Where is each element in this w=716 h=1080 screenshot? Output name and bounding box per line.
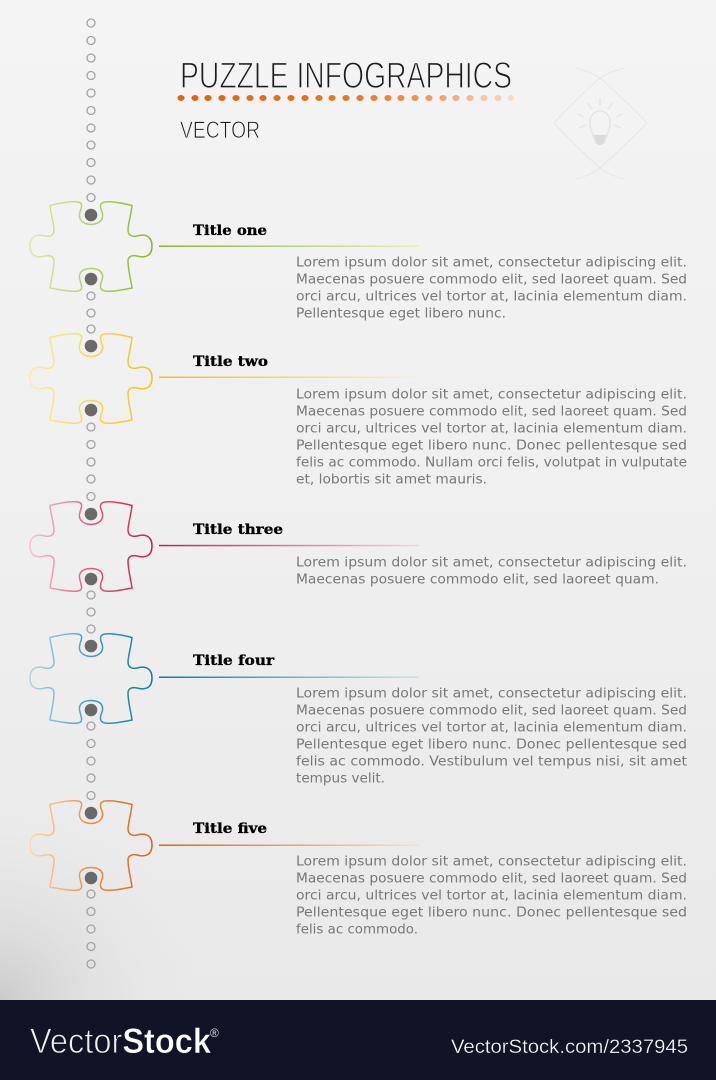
puzzle piece one xyxy=(30,202,152,291)
panel: step three xyxy=(30,502,687,591)
title: Title three xyxy=(193,522,283,538)
body text xyxy=(296,686,687,786)
body text: Pellentesque eget libero nunc. Donec pellentesque sed xyxy=(296,906,687,920)
footer bar xyxy=(0,1000,716,1080)
title: Title one xyxy=(193,223,267,239)
body text: Maecenas posuere commodo elit, sed laoreet quam. Sed xyxy=(296,704,687,718)
title: Title five xyxy=(193,821,267,837)
title: Title four xyxy=(193,653,275,669)
body text: Lorem ipsum dolor sit amet, consectetur adipiscing elit. xyxy=(296,854,687,870)
body text: tempus velit. xyxy=(296,772,385,786)
dots xyxy=(85,209,97,285)
body text: Pellentesque eget libero nunc. Donec pellentesque sed xyxy=(296,738,687,752)
subtitle: VECTOR xyxy=(180,117,260,144)
body text xyxy=(296,556,687,588)
icon: light bulb emblem xyxy=(554,68,647,179)
body text: felis ac commodo. xyxy=(296,922,418,938)
puzzle piece four xyxy=(30,634,152,723)
puzzle piece five xyxy=(30,801,152,890)
rule xyxy=(159,246,419,247)
dots xyxy=(85,807,97,884)
body text: Pellentesque eget libero nunc. xyxy=(296,306,506,322)
puzzle piece two xyxy=(30,334,152,423)
dots xyxy=(85,508,97,585)
body text xyxy=(296,388,687,488)
rule xyxy=(159,844,419,846)
body text: et, lobortis sit amet mauris. xyxy=(296,472,487,488)
body text: Maecenas posuere commodo elit, sed laoreet quam. Sed xyxy=(296,872,687,886)
body text: orci arcu, ultrices vel tortor at, lacinia elementum diam. xyxy=(296,888,687,904)
dotted orange divider xyxy=(177,95,514,101)
body text xyxy=(296,854,687,938)
body text: Lorem ipsum dolor sit amet, consectetur adipiscing elit. xyxy=(296,256,687,270)
body text: felis ac commodo. Vestibulum vel tempus nisi, sit amet xyxy=(296,754,687,770)
dots xyxy=(85,340,97,416)
rule xyxy=(159,676,419,678)
body text: Lorem ipsum dolor sit amet, consectetur adipiscing elit. xyxy=(296,388,687,402)
body text: Pellentesque eget libero nunc. Donec pellentesque sed xyxy=(296,438,687,454)
body text: Lorem ipsum dolor sit amet, consectetur adipiscing elit. xyxy=(296,556,687,570)
rule xyxy=(159,376,419,378)
body text: orci arcu, ultrices vel tortor at, lacinia elementum diam. xyxy=(296,290,687,304)
rule xyxy=(159,545,419,546)
body text: orci arcu, ultrices vel tortor at, lacinia elementum diam. xyxy=(296,422,687,436)
body text: Maecenas posuere commodo elit, sed laoreet quam. xyxy=(296,572,659,588)
body text: Maecenas posuere commodo elit, sed laoreet quam. Sed xyxy=(296,404,687,420)
puzzle piece three xyxy=(30,502,152,591)
panel: step two xyxy=(30,334,687,488)
title: PUZZLE INFOGRAPHICS xyxy=(180,55,512,96)
body text: felis ac commodo. Nullam orci felis, volutpat in vulputate xyxy=(296,456,687,470)
registered mark: ® xyxy=(210,1026,219,1040)
panel: step five xyxy=(30,801,687,938)
body text xyxy=(296,256,687,322)
panel: step four xyxy=(30,634,687,786)
title: Title two xyxy=(193,354,268,370)
vertical dotted connector xyxy=(87,19,95,968)
panel: step one xyxy=(30,202,687,322)
body text: Maecenas posuere commodo elit, sed laoreet quam. Sed xyxy=(296,272,687,288)
dots xyxy=(85,640,97,716)
body text: orci arcu, ultrices vel tortor at, lacinia elementum diam. xyxy=(296,720,687,736)
image id: VectorStock.com/2337945 xyxy=(451,1037,688,1058)
body text: Lorem ipsum dolor sit amet, consectetur adipiscing elit. xyxy=(296,686,687,702)
logo: VectorStock xyxy=(30,1022,211,1061)
